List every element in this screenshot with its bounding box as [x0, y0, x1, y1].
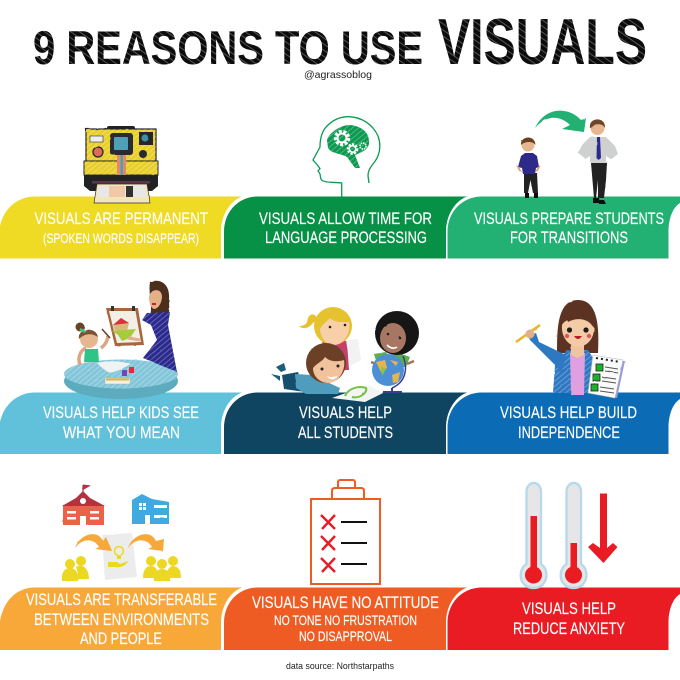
- icon: girl with pencil and checklist: [516, 300, 625, 398]
- panel: transferable between environments and people: VISUALS ARE TRANSFERABLE: [26, 591, 217, 609]
- panel: no attitude: NO DISAPPROVAL: [299, 629, 392, 644]
- panel: help kids see what you mean: VISUALS HELP KIDS SEE: [43, 404, 199, 422]
- school: [62, 484, 105, 525]
- woman: [142, 281, 177, 372]
- panel: visuals are permanent: VISUALS ARE PERMANENT: [34, 210, 208, 228]
- gears: [336, 132, 366, 153]
- title: 9 REASONS TO USE: [33, 21, 423, 74]
- panel: transferable between environments and people: [0, 588, 242, 650]
- panel: reduce anxiety: [448, 588, 680, 650]
- panel: help all students: VISUALS HELP: [299, 404, 392, 422]
- handle: @agrassoblog: [304, 69, 372, 81]
- house: [132, 494, 169, 524]
- panel: transferable between environments and people: BETWEEN ENVIRONMENTS: [34, 611, 209, 629]
- arrows: [75, 534, 164, 551]
- panel: help all students: [224, 392, 467, 454]
- icon: shared visual moving between groups of people: [62, 533, 181, 581]
- icon: instant camera: [84, 126, 158, 203]
- lines: [341, 522, 367, 564]
- checklist rows: [591, 364, 618, 393]
- crosses: [321, 515, 335, 572]
- girl: [76, 322, 110, 365]
- icon: three children with a globe and book: [271, 307, 419, 402]
- painting: [106, 306, 144, 346]
- icon: head with brain and gears: [313, 117, 380, 196]
- icon: adult teacher: [578, 119, 618, 204]
- blonde girl: [299, 307, 361, 370]
- icon: teacher showing a painting to a child at a table: [64, 281, 178, 399]
- icon: thermometer low: [561, 483, 586, 588]
- panel: prepare students for transitions: FOR TRANSITIONS: [510, 229, 628, 247]
- panel: reduce anxiety: VISUALS HELP: [522, 600, 616, 618]
- panel: visuals are permanent: (SPOKEN WORDS DISAPPEAR): [43, 231, 199, 246]
- people: [62, 556, 181, 581]
- panel: prepare students for transitions: [448, 196, 680, 258]
- icon: thermometer high: [521, 483, 546, 588]
- panel: no attitude: [224, 588, 467, 650]
- panel: build independence: INDEPENDENCE: [518, 424, 620, 442]
- panel: time for language processing: VISUALS ALLOW TIME FOR: [259, 210, 432, 228]
- panel: time for language processing: LANGUAGE PROCESSING: [265, 229, 427, 247]
- panel: visuals are permanent: [0, 196, 242, 258]
- title: [33, 5, 647, 78]
- icon: school and home: [62, 484, 169, 525]
- icon: down arrow: [588, 494, 618, 563]
- book: [332, 385, 383, 402]
- panel: reduce anxiety: REDUCE ANXIETY: [513, 620, 625, 638]
- boy lying down: [271, 343, 346, 394]
- panel: no attitude: NO TONE NO FRUSTRATION: [274, 613, 417, 628]
- panel: build independence: [448, 392, 680, 454]
- icon: curved arrow from student to adult: [535, 111, 586, 132]
- data source: data source: Northstarpaths: [286, 661, 394, 672]
- paper with bulb and hand: [102, 533, 137, 580]
- panel: time for language processing: [224, 196, 467, 258]
- panel: help kids see what you mean: [0, 392, 242, 454]
- table: [64, 360, 178, 399]
- panel: no attitude: VISUALS HAVE NO ATTITUDE: [252, 594, 439, 612]
- panel: build independence: VISUALS HELP BUILD: [500, 404, 637, 422]
- panel: help kids see what you mean: WHAT YOU MEAN: [63, 424, 180, 442]
- panel: transferable between environments and people: AND PEOPLE: [80, 630, 162, 648]
- panel: help all students: ALL STUDENTS: [298, 424, 393, 442]
- icon: boy student: [516, 137, 541, 198]
- icon: clipboard with crosses: [311, 480, 380, 584]
- child with globe: [371, 311, 419, 392]
